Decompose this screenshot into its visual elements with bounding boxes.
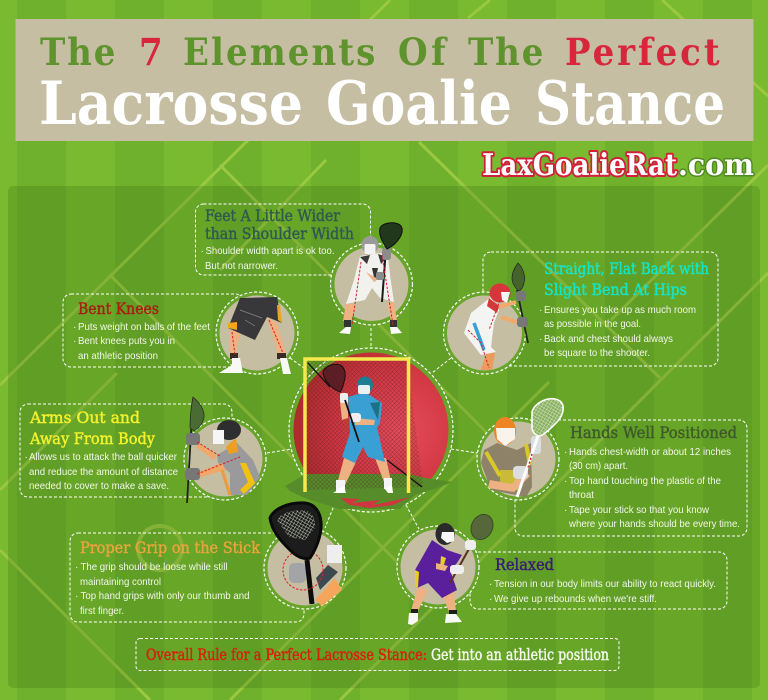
text: flat back: · <box>539 305 542 316</box>
text: bent knees: Puts weight on balls of the feet <box>78 322 210 333</box>
illustration: feet player <box>330 223 412 334</box>
text: hands: Hands chest-width or about 12 inches <box>569 447 731 458</box>
text: flat back: as possible in the goal. <box>544 319 641 330</box>
title line two: Stance <box>535 69 725 139</box>
text: arms out: Allows us to attack the ball quicker <box>29 452 178 463</box>
title line one <box>40 32 720 74</box>
overall rule callout <box>136 638 619 670</box>
title line two: Goalie <box>326 69 512 139</box>
text: proper grip: · <box>75 591 78 602</box>
site logo: LaxGoalieRat <box>482 148 677 183</box>
site logo: .com <box>678 148 754 183</box>
panel: relaxed <box>470 552 727 609</box>
illustration: stick grip close-up <box>264 503 346 609</box>
heading: arms out <box>29 409 155 448</box>
title line one: The <box>40 32 115 74</box>
text: proper grip: The grip should be loose while still <box>80 562 228 573</box>
title line two: Lacrosse <box>39 69 303 139</box>
text: flat back: Back and chest should always <box>544 334 673 345</box>
text: arms out <box>24 452 178 492</box>
text: bent knees <box>73 322 210 362</box>
text: bent knees: · <box>73 336 76 347</box>
text: hands <box>564 447 740 530</box>
text: arms out: needed to cover to make a save. <box>29 481 169 492</box>
overall rule callout: Get into an athletic position <box>431 646 609 664</box>
goal frame <box>305 359 408 493</box>
heading: bent knees: Bent Knees <box>78 300 159 318</box>
panel: arms out <box>20 404 232 497</box>
text: proper grip: maintaining control <box>80 577 161 588</box>
text: hands: (30 cm) apart. <box>569 461 628 472</box>
illustration: center goalie in goal <box>285 348 453 512</box>
overall rule callout: Overall Rule for a Perfect Lacrosse Stance: <box>146 646 427 664</box>
illustration: hands player <box>477 399 563 500</box>
center player <box>323 364 393 493</box>
illustration: relaxed player <box>397 511 497 625</box>
panel: hands well positioned <box>515 420 747 536</box>
text: bent knees: · <box>73 322 76 333</box>
text: flat back <box>539 305 696 359</box>
text: hands: · <box>564 476 567 487</box>
text: hands: throat <box>569 490 594 501</box>
heading: flat back <box>544 260 709 299</box>
text: hands: where your hands should be every time. <box>568 519 740 530</box>
connector lines <box>267 328 477 529</box>
text: hands: · <box>564 447 567 458</box>
text: feet <box>200 246 334 272</box>
text: hands: Top hand touching the plastic of the <box>569 476 721 487</box>
text: flat back: Ensures you take up as much room <box>544 305 696 316</box>
text: bent knees: an athletic position <box>78 351 158 362</box>
text: hands: · <box>564 505 567 516</box>
text: relaxed <box>489 579 716 605</box>
heading: relaxed: Relaxed <box>495 556 554 574</box>
text: proper grip: Top hand grips with only our thumb and <box>80 591 250 602</box>
panel: feet wider than shoulder <box>196 204 370 275</box>
text: proper grip: · <box>75 562 78 573</box>
text: feet: Shoulder width apart is ok too. <box>206 246 334 257</box>
title line one: 7 <box>139 32 163 74</box>
heading: feet: than Shoulder Width <box>205 225 354 243</box>
text: arms out: · <box>24 452 28 463</box>
text: flat back: · <box>539 334 542 345</box>
text: arms out: and reduce the amount of distance <box>29 467 178 478</box>
title line one: Perfect <box>565 32 720 74</box>
text: feet: · <box>200 246 204 257</box>
illustration: flat back player <box>444 263 528 374</box>
text: relaxed: We give up rebounds when we're stiff. <box>494 594 657 605</box>
heading: proper grip: Proper Grip on the Stick <box>80 539 261 557</box>
panel: bent knees <box>63 294 243 367</box>
text: relaxed: Tension in our body limits our ability to react quickly. <box>494 579 716 590</box>
heading: arms out: Arms Out and <box>29 409 140 427</box>
text: hands: Tape your stick so that you know <box>569 505 710 516</box>
text: proper grip <box>75 562 250 617</box>
illustration: arms out player <box>184 397 266 503</box>
illustration: bent knees player <box>216 292 298 374</box>
title line one: Of <box>398 32 448 74</box>
heading: feet <box>205 207 354 243</box>
heading: arms out: Away From Body <box>29 430 155 448</box>
title banner <box>16 19 754 141</box>
heading: flat back: Straight, Flat Back with <box>544 260 709 278</box>
red zigzag <box>340 497 410 508</box>
text: flat back: be square to the shooter. <box>544 348 650 359</box>
title line two <box>39 69 725 139</box>
text: relaxed: · <box>489 594 492 605</box>
text: relaxed: · <box>489 579 492 590</box>
panel: proper grip <box>70 533 304 622</box>
net <box>306 361 423 490</box>
heading: flat back: Slight Bend At Hips <box>544 281 687 299</box>
title line one: Elements <box>183 32 375 74</box>
stick head <box>532 399 563 436</box>
title line one: The <box>468 32 543 74</box>
ground shadow <box>285 474 452 509</box>
text: proper grip: first finger. <box>80 606 124 617</box>
heading: hands: Hands Well Positioned <box>570 424 737 442</box>
text: feet: But not narrower. <box>205 261 278 272</box>
heading: feet: Feet A Little Wider <box>205 207 341 225</box>
panel: straight flat back <box>483 252 718 366</box>
text: bent knees: Bent knees puts you in <box>78 336 175 347</box>
